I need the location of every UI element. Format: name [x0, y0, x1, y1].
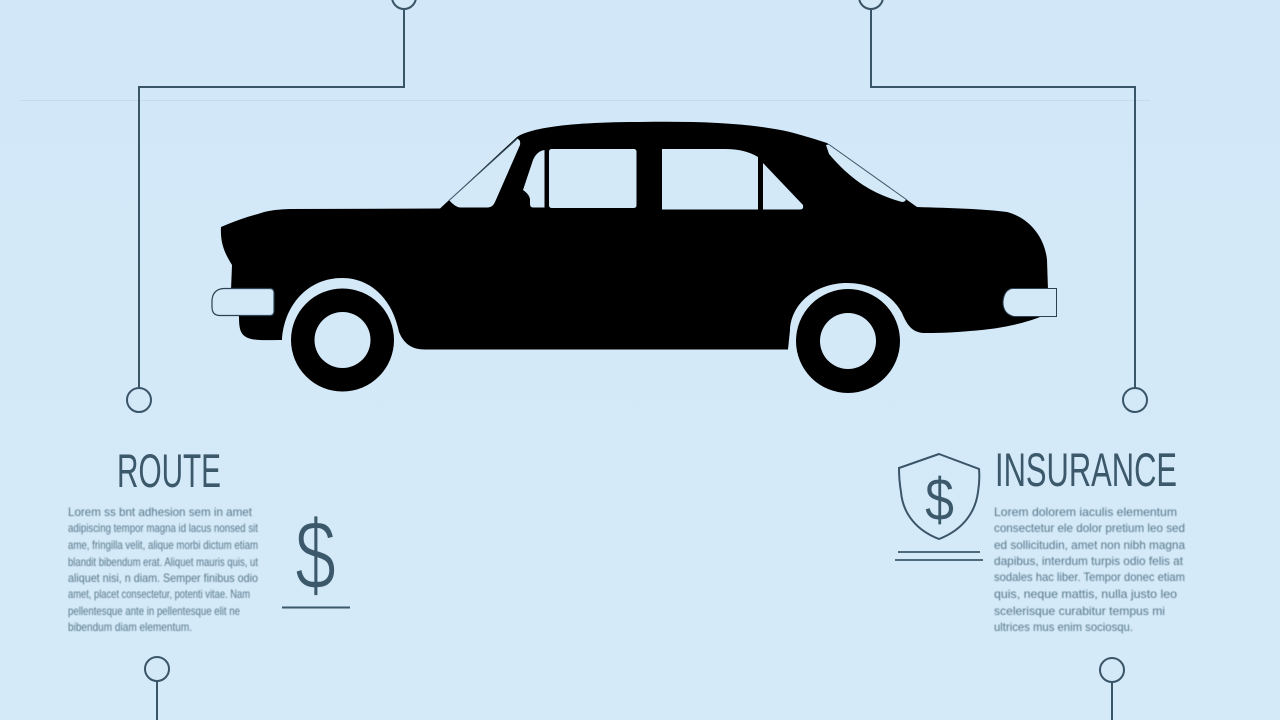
rear bumper	[1003, 288, 1056, 316]
front quarter window	[523, 150, 544, 208]
text block: route: blandit bibendum erat. Aliquet mauris quis, ut	[68, 555, 259, 569]
text block: insurance: Lorem dolorem iaculis elementum	[994, 505, 1177, 519]
rear window edge line	[829, 144, 907, 200]
text block: insurance: consectetur ele dolor pretium leo sed	[994, 521, 1185, 535]
rear quarter window	[763, 163, 803, 210]
rear window	[826, 145, 906, 202]
text block: route: amet, placet consectetur, potenti vitae. Nam	[68, 587, 250, 601]
text block: insurance: dapibus, interdum turpis odio felis at	[994, 554, 1184, 568]
windshield	[449, 138, 520, 208]
car silhouette	[212, 122, 1056, 393]
connector: bottom left	[145, 657, 169, 720]
connector: top left to route	[127, 0, 416, 412]
rear wheel	[796, 289, 900, 393]
text block: insurance: sodales hac liber. Tempor donec etiam	[994, 570, 1185, 584]
connector: top right to insurance	[859, 0, 1147, 412]
windshield edge line	[449, 139, 517, 200]
heading: route: ROUTE	[117, 444, 221, 497]
front bumper	[212, 288, 274, 316]
icon: dollar sign with baseline: $	[295, 499, 336, 610]
text block: insurance: quis, neque mattis, nulla justo leo	[994, 587, 1177, 601]
text block: route: ame, fringilla velit, alique morbi dictum etiam	[68, 538, 258, 552]
icon: shield with dollar sign	[895, 454, 983, 560]
text block: route: adipiscing tempor magna id lacus nonsed sit	[68, 521, 259, 535]
text block: insurance	[994, 505, 1185, 634]
connector: bottom right	[1100, 658, 1124, 720]
text block: route: bibendum diam elementum.	[68, 620, 192, 634]
front door window	[549, 149, 636, 208]
rear door window	[662, 149, 758, 210]
text block: insurance: scelerisque curabitur tempus mi	[994, 604, 1165, 618]
icon: shield with dollar sign: $	[925, 466, 954, 533]
text block: insurance: ed sollicitudin, amet non nibh magna	[994, 538, 1185, 552]
car body	[221, 122, 1048, 350]
text block: route: aliquet nisi, n diam. Semper finibus odio	[68, 571, 258, 585]
text block: route: Lorem ss bnt adhesion sem in amet	[68, 505, 253, 519]
text block: insurance: ultrices mus enim sociosqu.	[994, 620, 1133, 634]
text block: route: pellentesque ante in pellentesque elit ne	[68, 604, 240, 618]
text block: route	[68, 505, 259, 634]
front wheel	[291, 288, 394, 392]
heading: insurance: INSURANCE	[995, 443, 1177, 496]
